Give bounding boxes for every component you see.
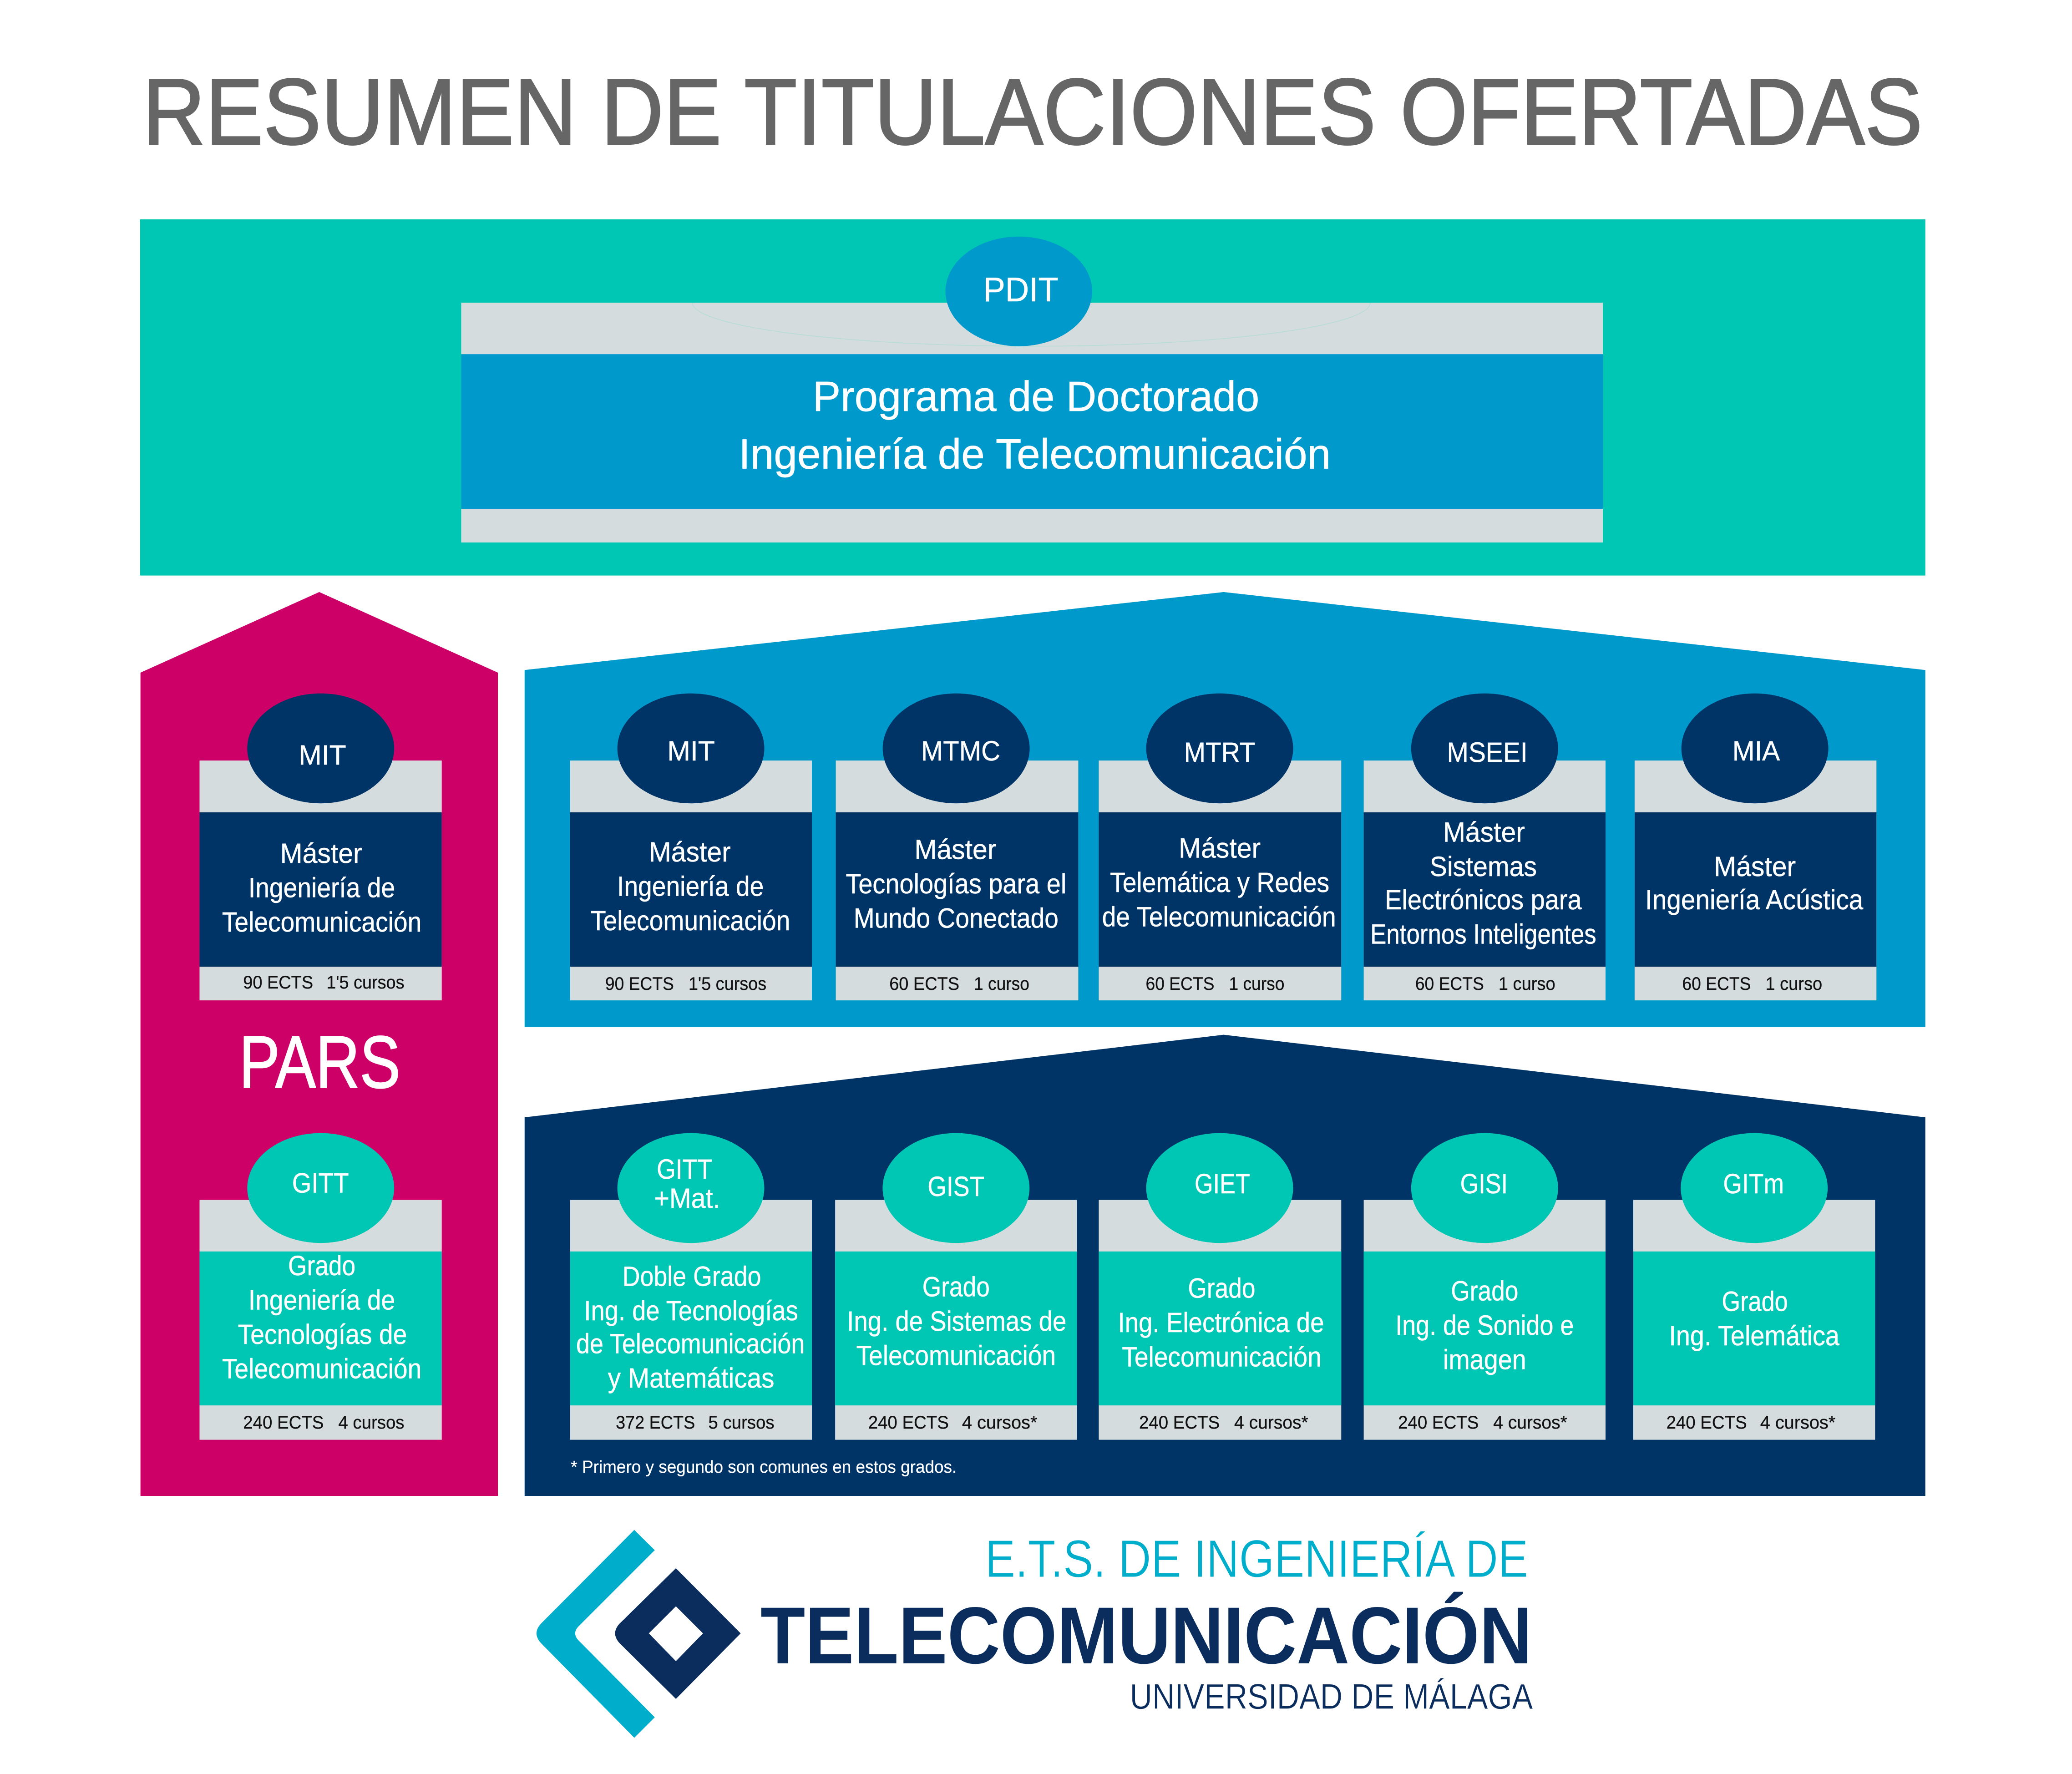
card: GIST: Ing. de Sistemas de xyxy=(847,1306,1066,1337)
card: PARS MIT xyxy=(199,694,442,1000)
card: MTMC xyxy=(836,694,1078,1000)
logo xyxy=(537,1529,1533,1738)
card: MIT xyxy=(570,694,812,1000)
card: GITT+Mat: y Matemáticas xyxy=(608,1363,775,1394)
card: GITm: 4 cursos* xyxy=(1760,1413,1835,1433)
card: MIT: 1'5 cursos xyxy=(689,974,766,994)
card: GITT+Mat: GITT xyxy=(657,1154,712,1185)
card: MIA: 60 ECTS xyxy=(1682,974,1751,994)
card: MIA: Ingeniería Acústica xyxy=(1645,884,1863,915)
badge: PDIT xyxy=(946,237,1092,346)
card: PARS MIT: Telecomunicación xyxy=(222,907,421,938)
card: GIET: 4 cursos* xyxy=(1234,1413,1308,1433)
card: MIT: MIT xyxy=(667,735,715,766)
card: MSEEI: MSEEI xyxy=(1447,737,1528,768)
card: MTMC: Tecnologías para el xyxy=(846,868,1066,899)
card: MSEEI: Máster xyxy=(1443,817,1525,848)
card: MTRT xyxy=(1099,694,1341,1000)
card: MTRT: Telemática y Redes xyxy=(1110,867,1329,898)
card: GISI: Ing. de Sonido e xyxy=(1395,1310,1574,1341)
logo university line: UNIVERSIDAD DE MÁLAGA xyxy=(1130,1677,1533,1717)
card: MTRT: MTRT xyxy=(1184,737,1256,768)
card: PARS GITT xyxy=(199,1133,442,1440)
card: MTRT: 1 curso xyxy=(1229,974,1284,994)
card: GITT+Mat: 372 ECTS xyxy=(616,1413,695,1433)
card: PARS MIT: 90 ECTS xyxy=(243,973,313,993)
masters house shape xyxy=(525,592,1925,1027)
card: GITT+Mat: Ing. de Tecnologías xyxy=(584,1295,798,1326)
card: GITT+Mat: de Telecomunicación xyxy=(576,1328,805,1359)
card: MSEEI: Entornos Inteligentes xyxy=(1370,918,1596,949)
card: GITm xyxy=(1633,1133,1875,1440)
card: GITT+Mat: Doble Grado xyxy=(623,1261,761,1292)
card: MIA: 1 curso xyxy=(1765,974,1822,994)
card: GIET: Ing. Electrónica de xyxy=(1118,1307,1324,1338)
card: GISI: 240 ECTS xyxy=(1398,1413,1479,1433)
panel: PARS arrow xyxy=(141,592,498,1496)
doctorate card xyxy=(461,303,1603,542)
card: GIST: 4 cursos* xyxy=(962,1413,1037,1433)
PARS label: PARS xyxy=(239,1021,400,1104)
card: MIA: MIA xyxy=(1733,735,1780,766)
card: PARS MIT: 1'5 cursos xyxy=(326,973,405,993)
card: GITm: 240 ECTS xyxy=(1667,1413,1747,1433)
PARS arrow shape xyxy=(141,592,498,1496)
card: GITT+Mat: +Mat. xyxy=(654,1183,720,1214)
card: GIET: GIET xyxy=(1195,1168,1250,1199)
card: MSEEI: Sistemas xyxy=(1430,851,1537,882)
card: MSEEI: 60 ECTS xyxy=(1415,974,1484,994)
doctorate name xyxy=(739,373,1331,477)
card: PARS GITT: 240 ECTS xyxy=(243,1413,324,1433)
card: MTMC: 60 ECTS xyxy=(889,974,959,994)
card: MIT: 90 ECTS xyxy=(605,974,674,994)
card: PARS GITT: GITT xyxy=(292,1168,349,1199)
panel: masters xyxy=(525,592,1925,1027)
card: GIST: GIST xyxy=(927,1171,984,1202)
card: GISI: 4 cursos* xyxy=(1493,1413,1567,1433)
card: GITm: Ing. Telemática xyxy=(1669,1320,1839,1351)
card: MTMC: Máster xyxy=(914,834,996,865)
card: PARS MIT: Ingeniería de xyxy=(248,872,395,903)
card: GIST: 240 ECTS xyxy=(868,1413,949,1433)
card: GITT+Mat xyxy=(570,1133,812,1440)
panel: doctorate xyxy=(140,219,1925,576)
card: GISI xyxy=(1364,1133,1606,1440)
card: GIET xyxy=(1099,1133,1341,1440)
card: GIET: Telecomunicación xyxy=(1122,1341,1322,1372)
logo icon: cyan chevron xyxy=(537,1530,655,1738)
card: GITm: Grado xyxy=(1722,1286,1788,1317)
logo school line: E.T.S. DE INGENIERÍA DE xyxy=(985,1529,1528,1588)
card: MIA: Máster xyxy=(1714,851,1796,882)
card: PARS GITT: Tecnologías de xyxy=(238,1319,407,1350)
card: MTMC: 1 curso xyxy=(974,974,1029,994)
card: PARS GITT: Telecomunicación xyxy=(222,1353,421,1384)
footnote: * Primero y segundo son comunes en estos grados. xyxy=(571,1457,957,1476)
card: GIET: Grado xyxy=(1188,1272,1256,1303)
card: MIA xyxy=(1635,694,1876,1000)
logo main line: TELECOMUNICACIÓN xyxy=(760,1591,1532,1681)
card: GIST: Telecomunicación xyxy=(856,1340,1056,1371)
card: MSEEI: 1 curso xyxy=(1499,974,1555,994)
card: MSEEI xyxy=(1364,694,1606,1000)
card: MTMC: MTMC xyxy=(921,735,1000,766)
badge: PDIT: PDIT xyxy=(983,270,1059,309)
card: MTRT: de Telecomunicación xyxy=(1102,902,1336,933)
degrees house shape xyxy=(525,1035,1925,1496)
card: GIST xyxy=(835,1133,1077,1440)
card: PARS GITT: Grado xyxy=(288,1250,355,1281)
card: PARS GITT: 4 cursos xyxy=(338,1413,405,1433)
card: MIT: Ingeniería de xyxy=(617,871,764,902)
card: GIST: Grado xyxy=(922,1272,990,1303)
card: MTRT: 60 ECTS xyxy=(1146,974,1214,994)
card: MTRT: Máster xyxy=(1179,833,1261,864)
card: PARS GITT: Ingeniería de xyxy=(248,1285,395,1316)
card: MIT: Máster xyxy=(649,836,731,867)
card: GIET: 240 ECTS xyxy=(1139,1413,1220,1433)
card: MSEEI: Electrónicos para xyxy=(1385,884,1582,915)
card: GISI: imagen xyxy=(1443,1344,1526,1375)
title: RESUMEN DE TITULACIONES OFERTADAS xyxy=(143,59,1923,164)
card: GITT+Mat: 5 cursos xyxy=(708,1413,775,1433)
card: GISI: GISI xyxy=(1460,1168,1508,1199)
doctorate name: Programa de Doctorado xyxy=(813,373,1259,420)
card: MIT: Telecomunicación xyxy=(591,905,790,936)
doctorate background xyxy=(140,219,1925,576)
logo icon: navy diamond xyxy=(615,1568,741,1699)
card: GISI: Grado xyxy=(1451,1275,1518,1306)
card: MTMC: Mundo Conectado xyxy=(854,902,1059,933)
doctorate name: Ingeniería de Telecomunicación xyxy=(739,430,1331,477)
card: PARS MIT: Máster xyxy=(280,838,362,869)
card: GITm: GITm xyxy=(1723,1168,1784,1199)
card: PARS MIT: MIT xyxy=(299,740,346,770)
panel: degrees xyxy=(525,1035,1925,1496)
